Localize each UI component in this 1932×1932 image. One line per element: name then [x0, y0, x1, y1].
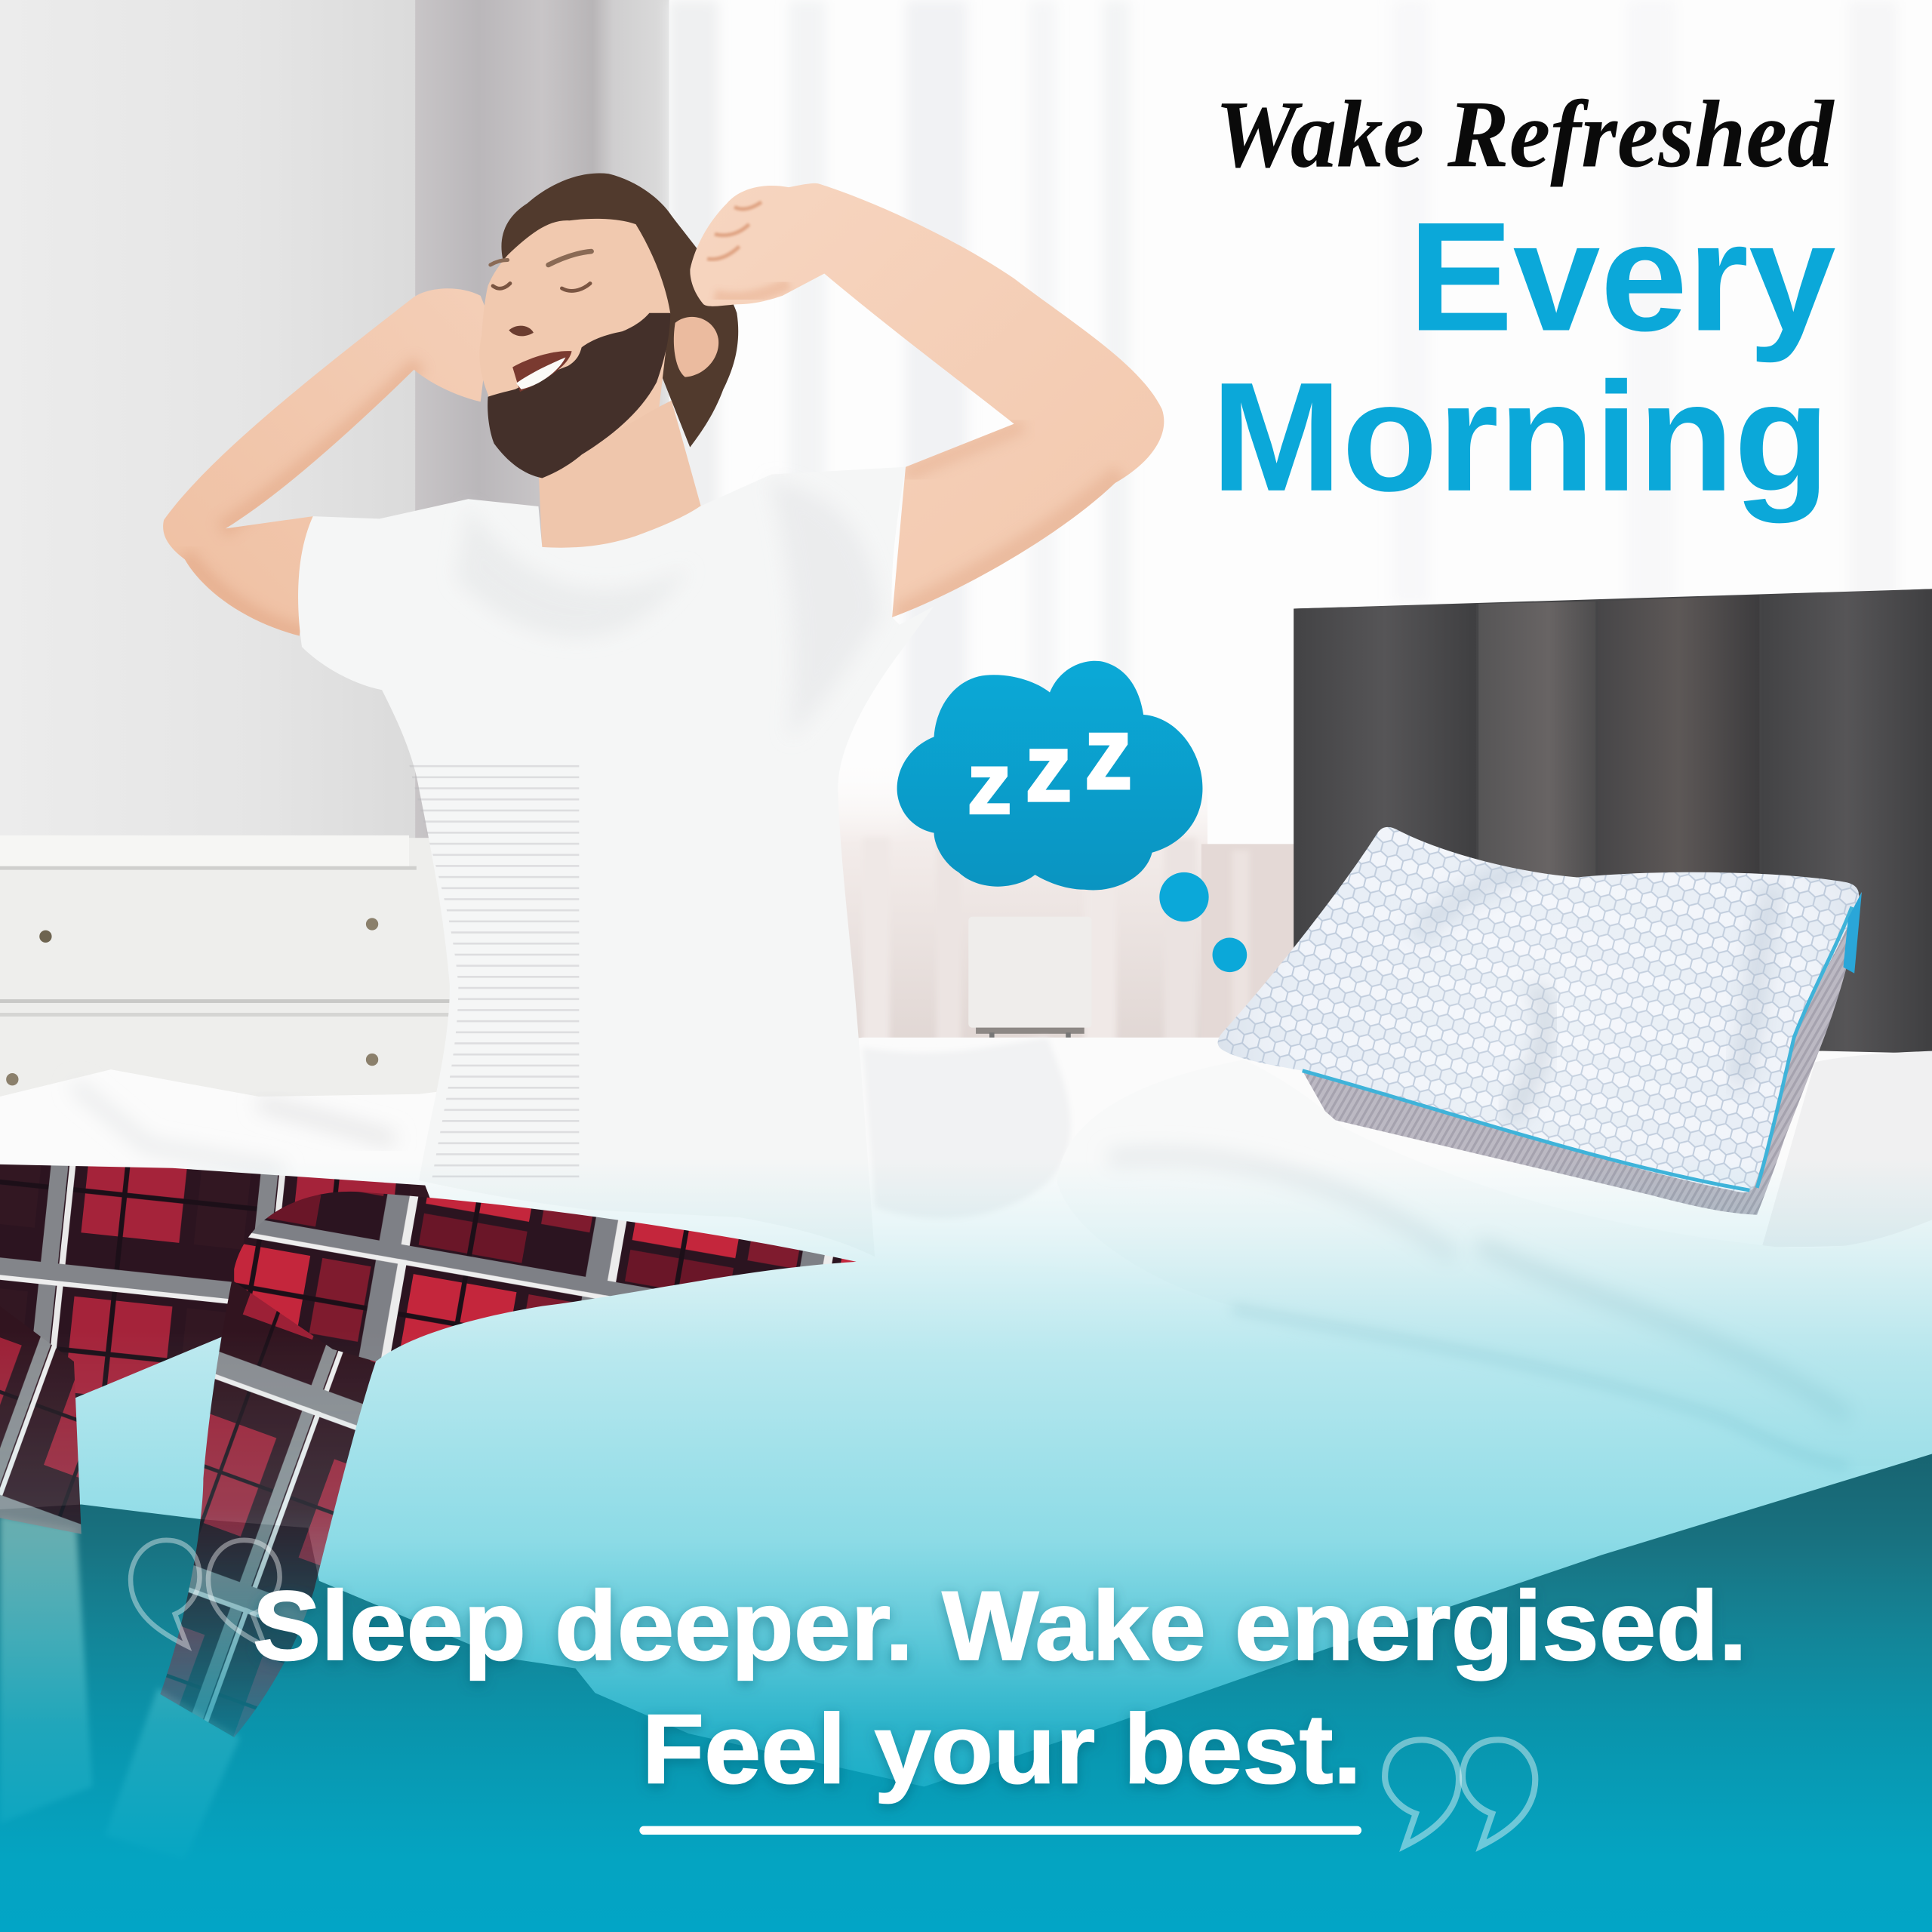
neck: [538, 401, 703, 552]
eyes and brows: [491, 251, 592, 291]
cloud body: [897, 661, 1202, 890]
nose: [509, 326, 534, 336]
left arm: [163, 288, 485, 635]
mouth: [512, 351, 572, 392]
thought cloud: [897, 661, 1202, 890]
zzz letters: z: [1084, 696, 1132, 811]
headboard: [1294, 589, 1932, 1084]
man: [148, 173, 1177, 1257]
teal gradient overlay: [0, 1158, 1932, 1932]
pajama trousers: [0, 1164, 857, 1737]
tagline underline: [639, 1826, 1361, 1835]
front duvet main: [319, 1259, 1932, 1786]
tagline: [253, 1571, 1747, 1804]
beard: [488, 313, 670, 478]
fist fingers: [707, 202, 761, 259]
bed duvet: back layer: [0, 1038, 1932, 1786]
dresser: [0, 835, 468, 1121]
background: grey curtain: [415, 0, 669, 1084]
pillow side band: [1303, 892, 1862, 1215]
floor below bed: [0, 1454, 1932, 1932]
lamp: [968, 917, 1092, 1052]
raised right arm and fist: [684, 173, 1177, 629]
heading: Morning: Morning: [1211, 350, 1829, 524]
zzz letters: z: [968, 737, 1011, 832]
ear: [674, 317, 718, 377]
front thigh: [234, 1192, 857, 1361]
duvet left fold beside legs: [75, 1316, 238, 1519]
heading: [1211, 81, 1836, 524]
front shin: [160, 1269, 376, 1737]
white pillow behind: [1762, 1051, 1932, 1247]
front duvet roll: [1057, 1060, 1932, 1466]
background: sheer white curtains: [669, 0, 1932, 1060]
face: [479, 219, 670, 475]
pillow top with hex texture: [1218, 827, 1859, 1192]
zzz letters: z: [1025, 714, 1072, 821]
quote mark: closing: [1385, 1740, 1535, 1846]
white t-shirt: [298, 467, 934, 1257]
back thigh: [0, 1164, 431, 1398]
hair: [501, 173, 738, 448]
background: bedroom wall: [0, 0, 425, 1109]
bare legs: [0, 1515, 240, 1860]
pillow blue piping: [1303, 907, 1852, 1190]
product pillow: [1208, 814, 1873, 1215]
heading: Wake Refreshed: Wake Refreshed: [1215, 81, 1835, 187]
tagline line 1: Sleep deeper. Wake energised.: [253, 1571, 1747, 1681]
quote mark: opening: [131, 1540, 280, 1646]
thought bubble small dot: [1213, 937, 1247, 972]
thought bubble large dot: [1159, 872, 1209, 921]
zzz letters: [968, 696, 1132, 832]
heading: Every: Every: [1408, 190, 1836, 364]
pillow shading: [1218, 863, 1859, 1127]
tagline line 2: Feel your best.: [642, 1694, 1361, 1804]
back shin: [0, 1331, 82, 1534]
